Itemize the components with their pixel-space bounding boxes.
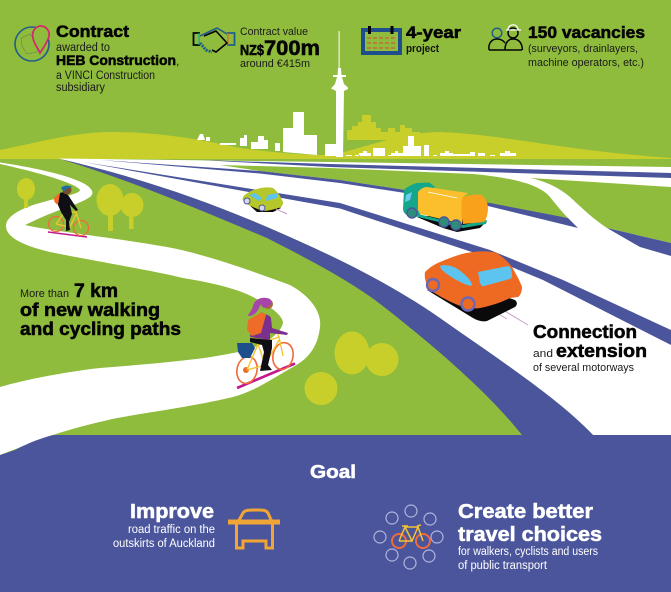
contract text: HEB Construction [56, 52, 176, 68]
tanker truck [403, 183, 488, 232]
travel choices text: Create better [458, 501, 593, 523]
contract block [15, 22, 179, 94]
cyclist on lower path [234, 298, 296, 388]
contract value text: 700m [264, 37, 320, 60]
green car [243, 187, 287, 214]
vacancies text: (surveyors, drainlayers, [528, 43, 638, 55]
trees [17, 178, 144, 231]
vacancies block [489, 23, 645, 69]
goal panel background [0, 435, 671, 592]
contract text: a VINCI Construction [56, 70, 155, 82]
contract text: awarded to [56, 42, 110, 54]
contract value text [240, 26, 320, 70]
improve text: Improve [130, 501, 214, 523]
icon: handshake [194, 28, 234, 52]
walking and cycling paths text: 7 km [74, 281, 118, 302]
goal: better travel choices [374, 501, 602, 572]
motorway roads [60, 158, 671, 435]
motorways text: extension [556, 340, 647, 361]
travel choices text [458, 501, 602, 572]
contract text: Contract [56, 22, 129, 41]
icon: two workers [489, 25, 522, 50]
duration text: 4-year [406, 23, 461, 42]
motorways text: of several motorways [533, 362, 634, 374]
orange car [425, 251, 528, 325]
cyclist on upper path [48, 186, 88, 237]
travel choices text: for walkers, cyclists and users [458, 546, 598, 558]
vacancies text: 150 vacancies [528, 23, 645, 42]
motorways text [533, 321, 647, 374]
improve text: road traffic on the [128, 524, 215, 536]
contract value text: Contract value [240, 26, 308, 38]
walking and cycling paths text [20, 281, 181, 339]
walking and cycling paths text: of new walking [20, 300, 160, 320]
goal: improve [113, 501, 280, 550]
contract text [56, 22, 179, 94]
goal heading: Goal [310, 462, 356, 482]
duration block [363, 23, 461, 55]
contract value text: around €415m [240, 58, 310, 70]
duration text: project [406, 43, 439, 55]
icon: car front [228, 510, 280, 548]
walking and cycling paths text: More than [20, 288, 69, 300]
walking and cycling paths text: and cycling paths [20, 319, 181, 339]
icon: location pin over globe [15, 26, 49, 61]
duration text [406, 23, 461, 55]
walking and cycling path [0, 162, 320, 455]
improve text: outskirts of Auckland [113, 538, 215, 550]
lime bushes [304, 332, 398, 405]
icon: bicycle in ring of circles [374, 505, 443, 569]
improve text [113, 501, 215, 550]
travel choices text: of public transport [458, 560, 548, 572]
icon: calendar [363, 26, 400, 53]
travel choices text: travel choices [458, 524, 602, 546]
contract text: , [176, 54, 179, 68]
motorways text: and [533, 348, 553, 360]
skyline and hill [0, 31, 671, 159]
vacancies text: machine operators, etc.) [528, 57, 644, 69]
contract value text: NZ$ [240, 42, 265, 59]
contract text: subsidiary [56, 82, 105, 94]
contract value block [194, 26, 320, 70]
motorways text: Connection [533, 321, 637, 342]
vacancies text [528, 23, 645, 69]
